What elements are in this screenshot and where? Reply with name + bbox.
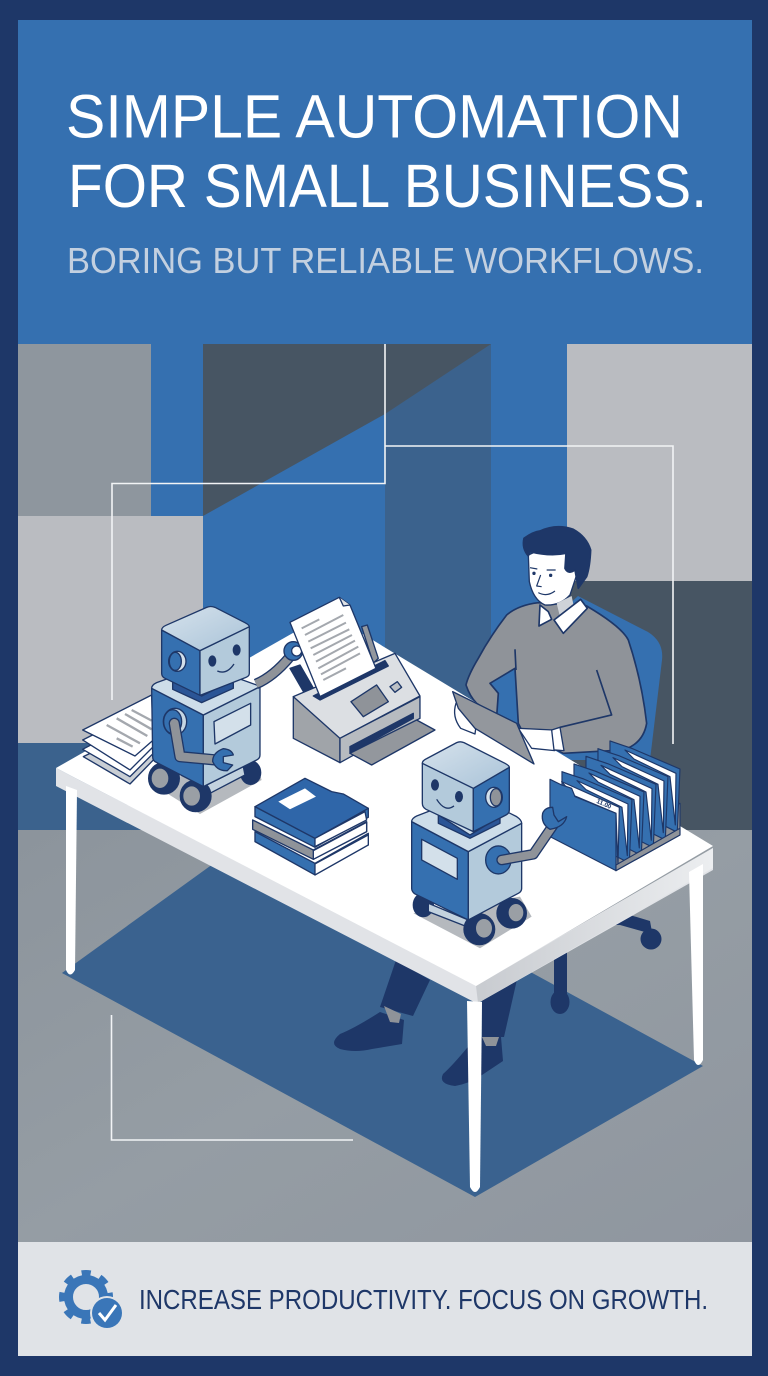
white outline frames [112,344,673,1140]
tablet [453,692,534,764]
folder rack [550,741,680,871]
title [66,82,707,220]
arm to printer [256,657,290,684]
subtitle: BORING BUT RELIABLE WORKFLOWS. [67,240,704,281]
wheels [413,893,433,917]
chair back [480,596,662,760]
man [466,527,647,753]
body [412,822,468,920]
head [422,763,473,832]
robot left [148,606,303,814]
paper stack [83,695,153,784]
hair [523,527,591,588]
man's legs and shoes [334,960,518,1086]
face [528,547,577,605]
table legs [66,786,703,1192]
folder stack [253,778,368,875]
office chair base [550,913,662,1014]
neck [438,815,500,838]
collar [539,605,552,626]
neck [173,680,233,703]
wheels [241,761,261,784]
header panel [18,20,752,344]
head [162,630,200,695]
title: FOR SMALL BUSINESS. [68,152,707,220]
man's hands and tablet [453,692,564,764]
icon: gear with check [62,1273,124,1330]
arm left [163,708,187,735]
facial features [532,572,552,577]
printer [290,597,435,765]
arm [486,846,511,874]
sweater [466,603,647,753]
geometric background [18,344,752,1242]
floor shadow [62,830,703,1197]
body [152,688,203,787]
footer panel [18,1242,752,1356]
table surface [56,613,713,1192]
robot right [412,742,567,948]
title: SIMPLE AUTOMATION [66,82,683,150]
printed page [290,597,376,697]
folder label: 11.00 [595,798,613,811]
